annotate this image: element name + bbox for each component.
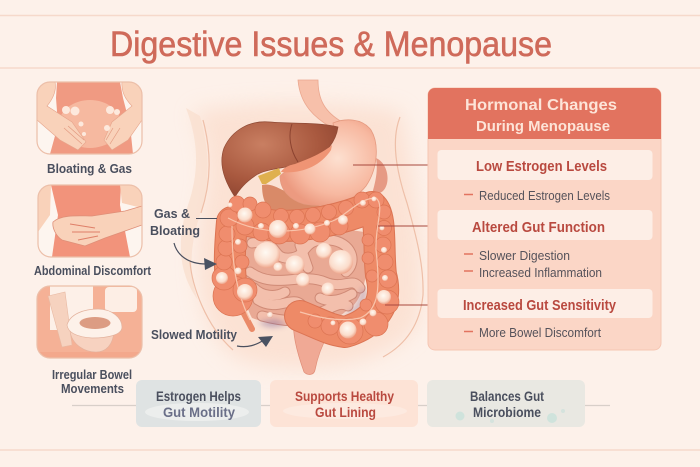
arrow: slowed motility [237, 336, 273, 347]
label: irregular bowel movements [52, 367, 132, 396]
card outlines [37, 82, 142, 358]
box: supports healthy gut lining: Supports Healthy [295, 388, 394, 404]
colon gas bubbles [216, 196, 391, 338]
panel: hormonal changes [428, 88, 661, 350]
spleen [372, 158, 388, 194]
label: irregular bowel movements: Irregular Bowel [52, 367, 132, 382]
illustration: digestive system [181, 80, 438, 374]
leader lines [353, 165, 438, 305]
item: slower digestion: Slower Digestion [479, 248, 570, 263]
box: increased gut sensitivity [438, 289, 652, 318]
box: estrogen helps gut motility: Estrogen Helps [156, 388, 241, 404]
title: Digestive Issues & Menopause [110, 25, 552, 64]
illustration: bloating and gas [37, 82, 142, 154]
box: altered gut function: Altered Gut Function [472, 219, 605, 236]
stomach [280, 120, 376, 205]
label: abdominal discomfort: Abdominal Discomfort [34, 263, 152, 278]
callout: gas and bloating: Bloating [150, 223, 200, 238]
box: increased gut sensitivity: Increased Gut Sensitivity [463, 297, 617, 314]
small intestine [241, 227, 367, 325]
box: estrogen helps gut motility [136, 380, 261, 427]
panel header [428, 88, 661, 139]
box: balances gut microbiome [427, 380, 585, 427]
box: estrogen helps gut motility: Gut Motility [163, 404, 235, 420]
body glow [192, 103, 422, 369]
callout: slowed motility [151, 327, 273, 347]
box: supports healthy gut lining: Gut Lining [315, 404, 376, 420]
intestine loops [250, 240, 360, 321]
gallbladder [258, 168, 281, 184]
gas bubbles in small intestine [254, 242, 353, 318]
box: balances gut microbiome: Microbiome [473, 404, 541, 420]
item: more bowel discomfort: More Bowel Discomfort [479, 325, 601, 340]
panel header: During Menopause [476, 118, 610, 135]
box: supports healthy gut lining [270, 380, 418, 427]
item: reduced estrogen levels: Reduced Estrogen Levels [479, 188, 610, 203]
box: altered gut function [438, 210, 652, 240]
liver [222, 122, 338, 197]
box: low estrogen levels [438, 150, 652, 180]
illustration: toilet [37, 286, 142, 358]
panel: symptoms [34, 82, 152, 396]
colon haustra [212, 192, 399, 344]
illustration: abdominal discomfort [38, 185, 142, 257]
box: balances gut microbiome: Balances Gut [470, 388, 544, 404]
shadow under intestine [258, 288, 366, 327]
label: irregular bowel movements: Movements [61, 381, 124, 396]
callout: gas and bloating: Gas & [154, 206, 190, 221]
intestine loop outlines [250, 240, 360, 321]
panel header: Hormonal Changes [465, 97, 617, 114]
label: bloating and gas: Bloating & Gas [47, 161, 132, 176]
box: low estrogen levels: Low Estrogen Levels [476, 158, 607, 175]
callout: gas and bloating [150, 206, 217, 270]
esophagus [298, 80, 342, 128]
connector line [72, 404, 610, 406]
duodenum behind stomach [262, 185, 340, 218]
item: increased inflammation: Increased Inflammation [479, 265, 602, 280]
rectum [294, 314, 335, 374]
large intestine [212, 192, 399, 344]
appendix [243, 312, 252, 329]
colon inner line [228, 198, 380, 320]
arrow: gas and bloating [174, 243, 217, 270]
callout: slowed motility: Slowed Motility [151, 327, 238, 342]
